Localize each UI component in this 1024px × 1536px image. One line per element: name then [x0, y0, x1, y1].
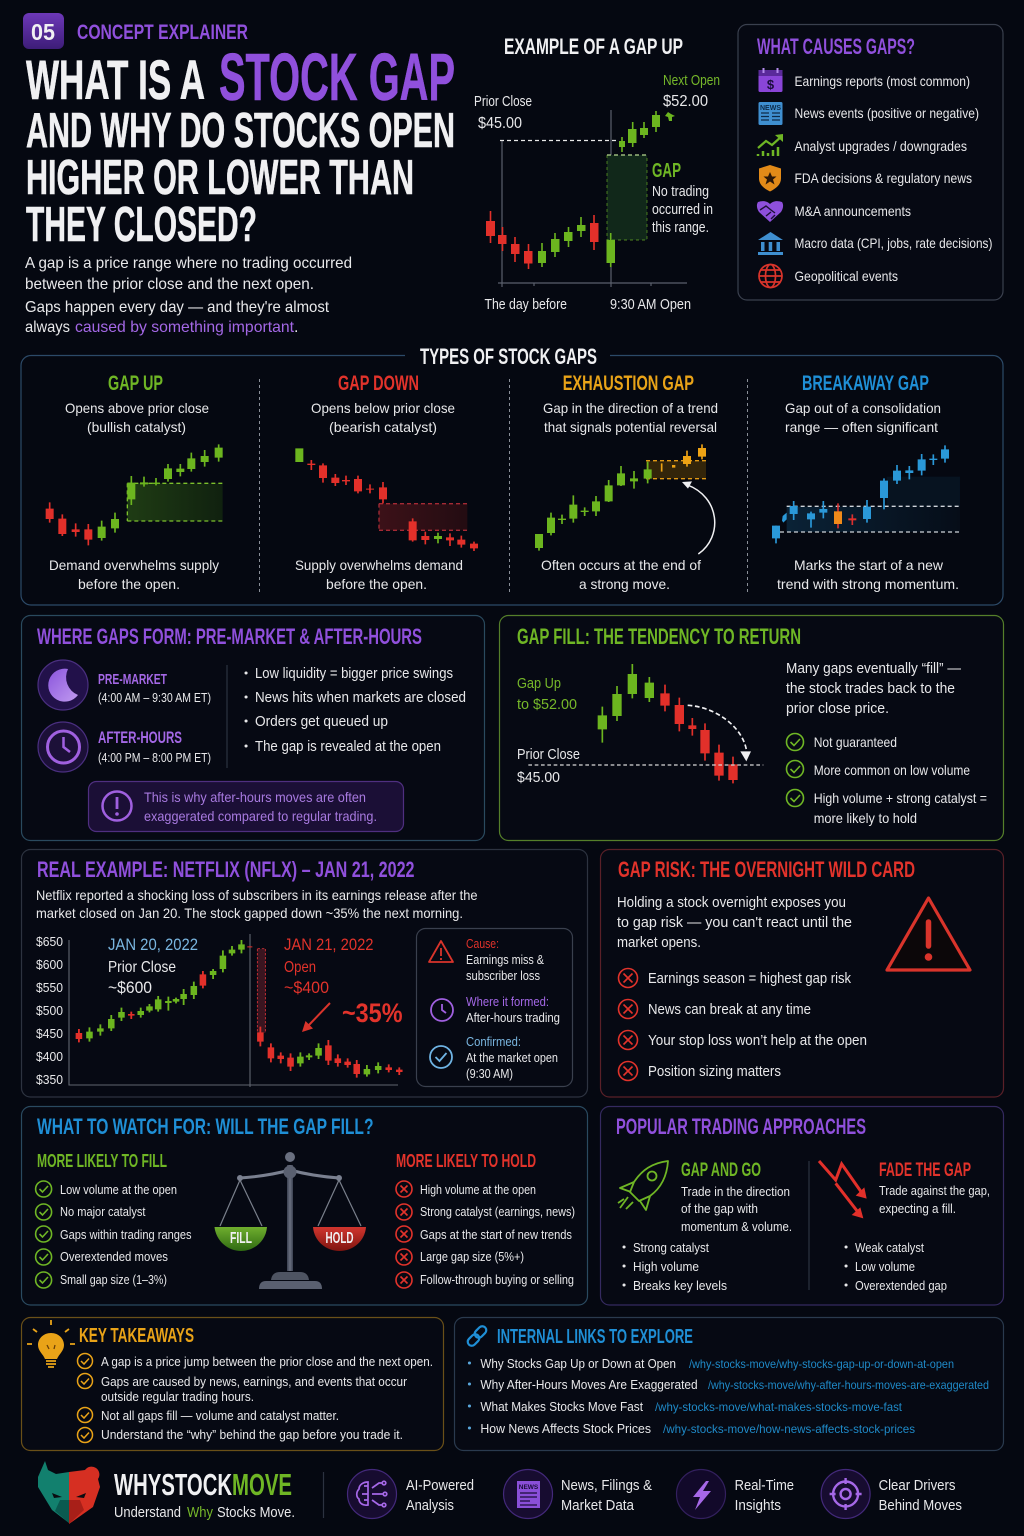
- strategy: gap and go: GAP AND GO: [681, 1160, 761, 1181]
- list: more likely to fill: MORE LIKELY TO FILL: [37, 1151, 167, 1171]
- title: STOCK GAP: [219, 40, 455, 115]
- cause list: FDA decisions & regulatory news: [794, 170, 972, 186]
- feature: clear drivers: [821, 1470, 962, 1518]
- icon: target: [821, 1470, 870, 1518]
- panel: where gaps form: [22, 616, 484, 840]
- panel: types of stock gaps: [21, 356, 1003, 605]
- candlestick chart: netflix: [76, 940, 403, 1078]
- panel heading: WHAT CAUSES GAPS?: [757, 34, 915, 59]
- description: to gap risk — you can't react until the: [617, 915, 852, 931]
- icon: light bulb: [27, 1320, 75, 1367]
- y axis labels: $500: [36, 1004, 63, 1018]
- chart labels: $45.00: [478, 115, 522, 132]
- panel: what causes gaps: [738, 24, 1003, 300]
- feature: clear drivers: Behind Moves: [879, 1498, 962, 1514]
- type: breakaway gap: range — often significant: [785, 419, 938, 435]
- strategy: gap and go: Trade in the direction: [681, 1184, 790, 1199]
- panel: internal links: [454, 1318, 1004, 1450]
- list: more likely to hold: Follow-through buying or selling: [420, 1272, 574, 1287]
- link list: Why Stocks Gap Up or Down at Open: [480, 1356, 676, 1371]
- list: more likely to fill: Overextended moves: [60, 1249, 168, 1264]
- type: gap up: before the open.: [78, 576, 180, 592]
- feature: news filings and market data: [504, 1470, 652, 1518]
- panel: real example netflix: [22, 850, 588, 1097]
- arrow: gap fill return: [688, 705, 751, 761]
- link list: /why-stocks-move/why-stocks-gap-up-or-down-at-open: [689, 1357, 954, 1371]
- list: more likely to hold: High volume at the open: [420, 1182, 536, 1197]
- type: gap up: Opens above prior close: [65, 400, 209, 416]
- strategy: fade the gap: expecting a fill.: [879, 1201, 956, 1216]
- candlestick chart: gap up: [46, 444, 223, 545]
- icon: clock: [431, 999, 453, 1021]
- chart labels: [517, 675, 580, 786]
- bullet list: News hits when markets are closed: [255, 690, 466, 706]
- strategy: gap and go: momentum & volume.: [681, 1219, 792, 1234]
- strategy: fade the gap: Low volume: [855, 1259, 915, 1274]
- link list: /why-stocks-move/why-after-hours-moves-are-exaggerated: [708, 1378, 989, 1392]
- type: gap down: before the open.: [326, 576, 427, 592]
- chart labels: No trading: [652, 184, 709, 200]
- description: Netflix reported a shocking loss of subscribers in its earnings release after the: [36, 887, 478, 903]
- chart labels: 9:30 AM Open: [610, 297, 691, 313]
- side box: cause details: Earnings miss &: [466, 953, 545, 967]
- takeaway list: Understand the “why” behind the gap before you trade it.: [101, 1428, 403, 1442]
- chart labels: Next Open: [663, 73, 720, 89]
- label: jan 21: Open: [284, 959, 316, 976]
- title: WHAT IS A: [26, 48, 205, 111]
- feature: real-time insights: Real-Time: [735, 1478, 794, 1494]
- type: gap down: Supply overwhelms demand: [295, 557, 463, 573]
- description: market closed on Jan 20. The stock gapped down ~35% the next morning.: [36, 905, 463, 921]
- panel heading: WHERE GAPS FORM: PRE-MARKET & AFTER-HOURS: [37, 624, 422, 649]
- explanation text: prior close price.: [786, 701, 889, 717]
- strategy: gap and go: Strong catalyst: [633, 1240, 709, 1255]
- chart labels: $45.00: [517, 769, 560, 786]
- badge 05: 05: [31, 19, 55, 45]
- y axis labels: $450: [36, 1027, 63, 1041]
- icon: calendar: [758, 68, 782, 92]
- axes: [498, 110, 687, 287]
- explanation text: [786, 661, 961, 717]
- type: exhaustion gap: [535, 372, 718, 592]
- icon: news: NEWS: [760, 105, 781, 112]
- badge 05: [23, 13, 64, 49]
- icon: rocket: [618, 1161, 668, 1210]
- icon: newspaper: NEWS: [519, 1484, 539, 1491]
- right pan: hold: [313, 1227, 366, 1251]
- type: exhaustion gap: Gap in the direction of a trend: [543, 400, 718, 416]
- type: breakaway gap: Marks the start of a new: [794, 557, 944, 573]
- risk list: [618, 968, 867, 1080]
- after-hours label: AFTER-HOURS: [98, 729, 182, 747]
- type: exhaustion gap: that signals potential reversal: [544, 419, 717, 435]
- chart labels: this range.: [652, 220, 709, 236]
- stat: minus 35 percent: ~35%: [342, 998, 402, 1028]
- link list: [469, 1356, 989, 1436]
- feature: ai-powered analysis: Analysis: [406, 1498, 454, 1514]
- intro text: [25, 255, 352, 336]
- icon: bank: [758, 232, 783, 255]
- tagline: [114, 1505, 295, 1521]
- cause list: Earnings reports (most common): [794, 73, 970, 89]
- icon: calendar: $: [767, 77, 775, 92]
- icon: fade arrows: [819, 1161, 867, 1218]
- icon: brain: [348, 1470, 396, 1518]
- chart labels: Gap Up: [517, 675, 561, 692]
- link list: /why-stocks-move/what-makes-stocks-move-fast: [655, 1400, 903, 1414]
- side box: cause details: Confirmed:: [466, 1035, 521, 1049]
- icon: warning triangle: [887, 898, 970, 970]
- icon: balance scale: [214, 1152, 366, 1289]
- icon: chain link: [466, 1325, 488, 1347]
- icon: bull and bear logo: [38, 1461, 100, 1524]
- y axis labels: $600: [36, 958, 63, 972]
- bullet list: Orders get queued up: [255, 714, 388, 730]
- list: more likely to hold: [396, 1151, 575, 1288]
- description: [617, 895, 852, 951]
- risk list: News can break at any time: [648, 1002, 811, 1018]
- takeaway list: [78, 1354, 433, 1442]
- list: more likely to hold: Large gap size (5%+): [420, 1249, 524, 1264]
- icon: globe: [759, 264, 782, 288]
- candlestick chart: gap down: [295, 448, 478, 551]
- strategy: gap and go: High volume: [633, 1259, 699, 1274]
- icon: shield: [759, 165, 781, 192]
- icon: news: [758, 102, 782, 125]
- list: more likely to fill: [36, 1151, 192, 1288]
- link list: /why-stocks-move/how-news-affects-stock-prices: [663, 1422, 915, 1436]
- icon: lightning bolt: [676, 1470, 726, 1518]
- callout: exaggerated compared to regular trading.: [144, 808, 377, 824]
- label: jan 21: JAN 21, 2022: [284, 936, 374, 954]
- pre-market label: PRE-MARKET: [98, 671, 167, 688]
- type: breakaway gap: BREAKAWAY GAP: [802, 372, 929, 395]
- intro text: A gap is a price range where no trading occurred: [25, 255, 352, 272]
- panel heading: GAP FILL: THE TENDENCY TO RETURN: [517, 624, 801, 649]
- label: jan 20: ~$600: [108, 979, 152, 997]
- footer: brand: [38, 1461, 295, 1524]
- pre-market label: (4:00 AM – 9:30 AM ET): [98, 691, 211, 705]
- check list: Not guaranteed: [814, 734, 897, 750]
- strategy: fade the gap: [846, 1160, 990, 1293]
- after-hours label: [98, 729, 211, 765]
- strategy: fade the gap: FADE THE GAP: [879, 1160, 971, 1181]
- type: gap down: (bearish catalyst): [329, 419, 437, 435]
- list: more likely to hold: MORE LIKELY TO HOLD: [396, 1151, 536, 1171]
- candlestick chart: breakaway gap: [772, 445, 960, 543]
- feature: news filings and market data: Market Data: [561, 1498, 635, 1514]
- wordmark: WHYSTOCK: [114, 1467, 232, 1502]
- icon: newspaper: [504, 1470, 552, 1518]
- feature: real-time insights: [676, 1470, 794, 1518]
- takeaway list: outside regular trading hours.: [101, 1390, 254, 1404]
- check list: more likely to hold: [814, 810, 917, 826]
- panel: key takeaways: [22, 1318, 444, 1450]
- y axis labels: $650: [36, 935, 63, 949]
- type: exhaustion gap: Often occurs at the end of: [541, 557, 701, 573]
- cause list: Macro data (CPI, jobs, rate decisions): [794, 235, 992, 251]
- description: [36, 887, 478, 921]
- cause list: Analyst upgrades / downgrades: [794, 138, 967, 154]
- intro text: Gaps happen every day — and they're almost: [25, 299, 330, 316]
- link list: How News Affects Stock Prices: [480, 1421, 651, 1436]
- label: jan 21: [284, 936, 374, 997]
- cause list: M&A announcements: [794, 203, 911, 219]
- description: Holding a stock overnight exposes you: [617, 895, 846, 911]
- list: more likely to hold: Strong catalyst (earnings, news): [420, 1204, 575, 1219]
- gap zone: [607, 155, 647, 240]
- check list: More common on low volume: [814, 762, 970, 778]
- side box: cause details: Cause:: [466, 937, 499, 951]
- header: badge and category: [23, 13, 248, 49]
- type: exhaustion gap: a strong move.: [579, 576, 670, 592]
- strategy: gap and go: Breaks key levels: [633, 1278, 727, 1293]
- panel: what to watch for: [22, 1106, 588, 1305]
- side box: cause details: After-hours trading: [466, 1011, 560, 1025]
- takeaway list: Not all gaps fill — volume and catalyst matter.: [101, 1409, 339, 1423]
- callout: [88, 782, 404, 832]
- list: more likely to fill: Small gap size (1–3%): [60, 1272, 167, 1287]
- bullet list: The gap is revealed at the open: [255, 739, 441, 755]
- chart heading: EXAMPLE OF A GAP UP: [504, 34, 683, 59]
- tagline: Why: [187, 1505, 214, 1521]
- strategy: fade the gap: Weak catalyst: [855, 1240, 924, 1255]
- label: jan 21: ~$400: [284, 979, 329, 997]
- risk list: Position sizing matters: [648, 1064, 781, 1080]
- cause list: Geopolitical events: [794, 268, 898, 284]
- intro text: .: [294, 319, 298, 336]
- description: market opens.: [617, 935, 701, 951]
- chart labels: Prior Close: [517, 746, 580, 763]
- icon: check: [430, 1046, 452, 1068]
- y axis labels: $400: [36, 1050, 63, 1064]
- panel heading: POPULAR TRADING APPROACHES: [616, 1114, 866, 1139]
- icon: clock: [38, 722, 88, 772]
- feature: news filings and market data: News, Filings &: [561, 1478, 652, 1494]
- bullet list: Low liquidity = bigger price swings: [255, 666, 453, 682]
- chart labels: $52.00: [663, 93, 708, 110]
- label: jan 20: [108, 936, 198, 997]
- y axis labels: [36, 935, 63, 1087]
- panel: gap risk: [600, 850, 1004, 1097]
- list: more likely to fill: No major catalyst: [60, 1204, 146, 1219]
- strategy: fade the gap: Trade against the gap,: [879, 1183, 990, 1198]
- intro text: caused by something important: [75, 319, 295, 336]
- chart labels: occurred in: [652, 202, 713, 218]
- tagline: Stocks Move.: [217, 1505, 295, 1521]
- risk list: Your stop loss won’t help at the open: [648, 1033, 867, 1049]
- pre-market label: [98, 671, 211, 705]
- panel: popular trading approaches: [600, 1106, 1004, 1305]
- panel heading: REAL EXAMPLE: NETFLIX (NFLX) – JAN 21, 2022: [37, 857, 414, 882]
- tagline: Understand: [114, 1505, 181, 1521]
- chart: example of a gap up: [474, 34, 720, 313]
- feature: ai-powered analysis: [348, 1470, 474, 1518]
- bullet list: [246, 666, 466, 755]
- chart labels: The day before: [484, 297, 567, 313]
- label: jan 20: JAN 20, 2022: [108, 936, 198, 954]
- type: gap down: GAP DOWN: [338, 372, 419, 395]
- risk list: Earnings season = highest gap risk: [648, 971, 852, 987]
- chart labels: [474, 73, 720, 313]
- type: gap up: Demand overwhelms supply: [49, 557, 219, 573]
- list: more likely to fill: Gaps within trading ranges: [60, 1227, 192, 1242]
- category label: CONCEPT EXPLAINER: [77, 21, 248, 44]
- type: gap down: [295, 372, 478, 592]
- side box: cause details: At the market open: [466, 1051, 558, 1065]
- panel heading: WHAT TO WATCH FOR: WILL THE GAP FILL?: [37, 1114, 374, 1139]
- icon: analyst chart: [758, 134, 783, 156]
- list: more likely to hold: Gaps at the start of new trends: [420, 1227, 572, 1242]
- cause list: News events (positive or negative): [794, 105, 979, 121]
- cause list: [794, 73, 992, 284]
- label: jan 20: Prior Close: [108, 959, 176, 976]
- left pan: fill: FILL: [230, 1230, 252, 1247]
- candlestick chart: exhaustion gap: [535, 444, 715, 554]
- icon: handshake: [757, 201, 783, 222]
- side box: cause details: (9:30 AM): [466, 1067, 513, 1081]
- type: breakaway gap: [772, 372, 960, 592]
- wordmark: MOVE: [232, 1467, 292, 1502]
- type: gap down: Opens below prior close: [311, 400, 455, 416]
- title: HIGHER OR LOWER THAN: [26, 151, 414, 205]
- y axis labels: $550: [36, 981, 63, 995]
- panel heading: KEY TAKEAWAYS: [79, 1325, 194, 1347]
- panel: gap fill: [500, 616, 1004, 840]
- panel heading: INTERNAL LINKS TO EXPLORE: [497, 1326, 693, 1348]
- link list: What Makes Stocks Move Fast: [480, 1399, 643, 1414]
- link list: Why After-Hours Moves Are Exaggerated: [480, 1377, 698, 1392]
- title: [26, 40, 455, 252]
- intro text: always: [25, 319, 70, 336]
- feature: real-time insights: Insights: [735, 1498, 781, 1514]
- right pan: hold: HOLD: [326, 1230, 354, 1247]
- after-hours label: (4:00 PM – 8:00 PM ET): [98, 751, 211, 765]
- icon: moon: [38, 660, 88, 710]
- intro text: between the prior close and the next open.: [25, 276, 314, 293]
- type: breakaway gap: Gap out of a consolidation: [785, 400, 941, 416]
- strategy: fade the gap: Overextended gap: [855, 1278, 947, 1293]
- y axis labels: $350: [36, 1073, 63, 1087]
- feature: clear drivers: Clear Drivers: [879, 1478, 956, 1494]
- check list: [786, 734, 987, 826]
- takeaway list: Gaps are caused by news, earnings, and events that occur: [101, 1375, 407, 1389]
- side box: cause details: Where it formed:: [466, 995, 549, 1009]
- list: more likely to fill: Low volume at the open: [60, 1182, 177, 1197]
- side box: cause details: [416, 928, 572, 1086]
- explanation text: Many gaps eventually “fill” —: [786, 661, 961, 677]
- type: gap up: [46, 372, 223, 592]
- takeaway list: A gap is a price jump between the prior close and the next open.: [101, 1355, 433, 1369]
- candlestick chart: gap fill: [528, 664, 763, 783]
- type: gap up: GAP UP: [108, 372, 163, 395]
- strategy: gap and go: of the gap with: [681, 1201, 758, 1216]
- arrow: to exhaustion gap: [682, 481, 715, 554]
- chart labels: GAP: [652, 160, 681, 182]
- section title: types of stock gaps: TYPES OF STOCK GAPS: [420, 344, 597, 369]
- title: AND WHY DO STOCKS OPEN: [26, 104, 455, 158]
- check list: High volume + strong catalyst =: [814, 790, 987, 806]
- left pan: fill: [214, 1227, 267, 1251]
- side box: cause details: subscriber loss: [466, 969, 540, 983]
- title: THEY CLOSED?: [26, 198, 257, 252]
- chart labels: to $52.00: [517, 696, 577, 713]
- candles: [486, 111, 675, 269]
- explanation text: the stock trades back to the: [786, 681, 955, 697]
- type: breakaway gap: trend with strong momentum.: [777, 576, 959, 592]
- feature: ai-powered analysis: AI-Powered: [406, 1478, 474, 1494]
- icon: warning: [429, 941, 453, 962]
- type: gap up: (bullish catalyst): [87, 419, 186, 435]
- strategy: gap and go: [624, 1160, 792, 1293]
- chart labels: Prior Close: [474, 94, 532, 110]
- callout: This is why after-hours moves are often: [144, 789, 366, 805]
- type: exhaustion gap: EXHAUSTION GAP: [563, 372, 694, 395]
- arrow: down to open: [302, 1003, 330, 1032]
